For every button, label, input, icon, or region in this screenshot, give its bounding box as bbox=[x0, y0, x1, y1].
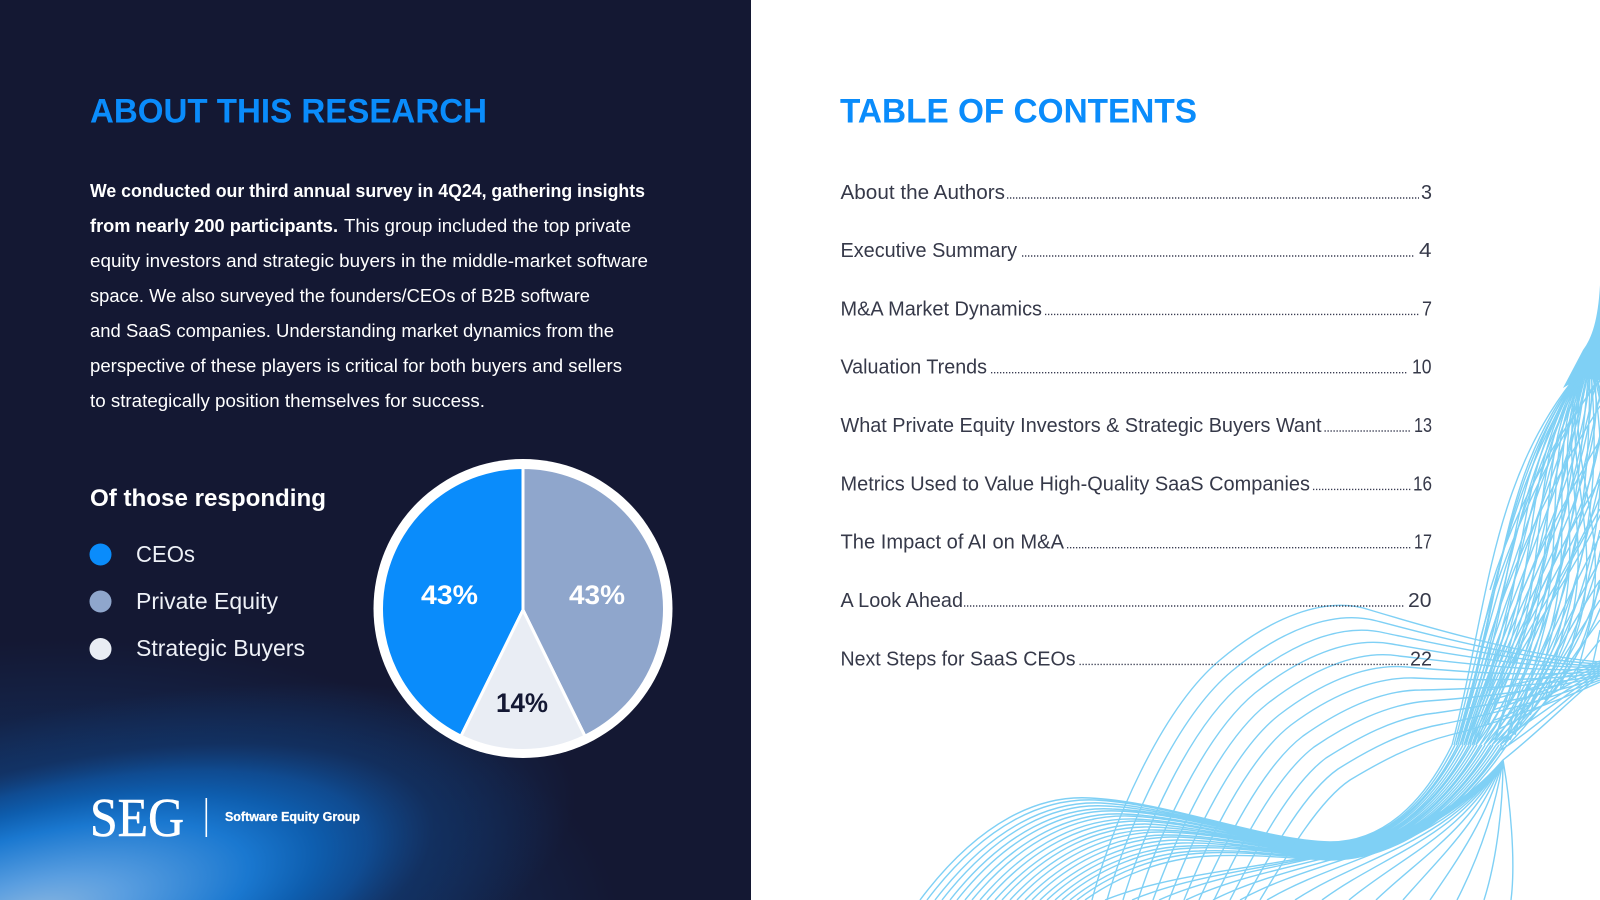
entry: what investors and buyers want: 13 bbox=[1414, 415, 1432, 437]
pie chart: respondents: 43% bbox=[569, 580, 625, 610]
text block: research description: and SaaS companies. Understanding market dynamics from the bbox=[90, 321, 614, 341]
heading: about this research: ABOUT THIS RESEARCH bbox=[90, 92, 487, 130]
entry: valuation trends: 10 bbox=[1412, 357, 1432, 379]
entry: m&a market dynamics: M&A Market Dynamics bbox=[840, 298, 1042, 320]
entry: a look ahead: 20 bbox=[1408, 590, 1432, 612]
text block: research description bbox=[90, 181, 648, 411]
text block: research description: This group included the top private bbox=[344, 216, 631, 236]
text block: research description: space. We also surveyed the founders/CEOs of B2B software bbox=[90, 286, 590, 306]
legend item: CEOs: CEOs bbox=[136, 541, 195, 567]
entry: next steps: 22 bbox=[1410, 648, 1432, 670]
pie chart: respondents: 43% bbox=[421, 580, 478, 610]
logo: Software Equity Group: Software Equity Group bbox=[225, 809, 360, 824]
entry: next steps: Next Steps for SaaS CEOs bbox=[840, 648, 1076, 670]
entry: executive summary: Executive Summary bbox=[840, 240, 1017, 262]
entry: about the authors: 3 bbox=[1421, 182, 1432, 204]
text block: research description: equity investors and strategic buyers in the middle-market software bbox=[90, 251, 648, 271]
decorative wave of blue lines bbox=[920, 285, 1600, 900]
list: contents entries bbox=[840, 182, 1432, 670]
legend item: strategic buyers: Strategic Buyers bbox=[136, 635, 305, 661]
entry: valuation trends: Valuation Trends bbox=[840, 357, 987, 379]
pie chart: respondents bbox=[374, 459, 672, 758]
heading: table of contents: TABLE OF CONTENTS bbox=[840, 92, 1197, 130]
entry: about the authors bbox=[840, 182, 1432, 204]
entry: a look ahead: A Look Ahead bbox=[840, 590, 963, 612]
legend heading: Of those responding bbox=[90, 485, 326, 512]
entry: executive summary: 4 bbox=[1419, 240, 1432, 262]
entry: next steps bbox=[840, 648, 1432, 670]
entry: impact of ai bbox=[840, 532, 1432, 554]
panel: table of contents bbox=[751, 0, 1600, 900]
logo: Software Equity Group bbox=[90, 787, 360, 848]
entry: executive summary bbox=[840, 240, 1432, 262]
pie chart: respondents: 14% bbox=[496, 688, 548, 718]
entry: a look ahead bbox=[840, 590, 1432, 612]
legend: of those responding bbox=[90, 485, 326, 661]
text block: research description: perspective of these players is critical for both buyers and sellers bbox=[90, 356, 622, 376]
entry: about the authors: About the Authors bbox=[840, 182, 1005, 204]
logo: Software Equity Group: SEG bbox=[90, 787, 184, 848]
entry: impact of ai: The Impact of AI on M&A bbox=[840, 532, 1065, 554]
text block: research description: We conducted our third annual survey in 4Q24, gathering insights bbox=[90, 181, 645, 201]
panel: about this research bbox=[0, 0, 751, 900]
entry: m&a market dynamics: 7 bbox=[1422, 298, 1432, 320]
entry: what investors and buyers want: What Private Equity Investors & Strategic Buyers Want bbox=[840, 415, 1322, 437]
entry: m&a market dynamics bbox=[840, 298, 1432, 320]
entry: impact of ai: 17 bbox=[1414, 532, 1432, 554]
legend item: CEOs bbox=[90, 541, 195, 567]
text block: research description: from nearly 200 participants. bbox=[90, 216, 338, 236]
entry: valuation trends bbox=[840, 357, 1432, 379]
text block: research description: to strategically position themselves for success. bbox=[90, 391, 485, 411]
entry: metrics: 16 bbox=[1413, 473, 1432, 495]
legend item: private equity: Private Equity bbox=[136, 588, 278, 614]
entry: metrics: Metrics Used to Value High-Quality SaaS Companies bbox=[840, 473, 1310, 495]
